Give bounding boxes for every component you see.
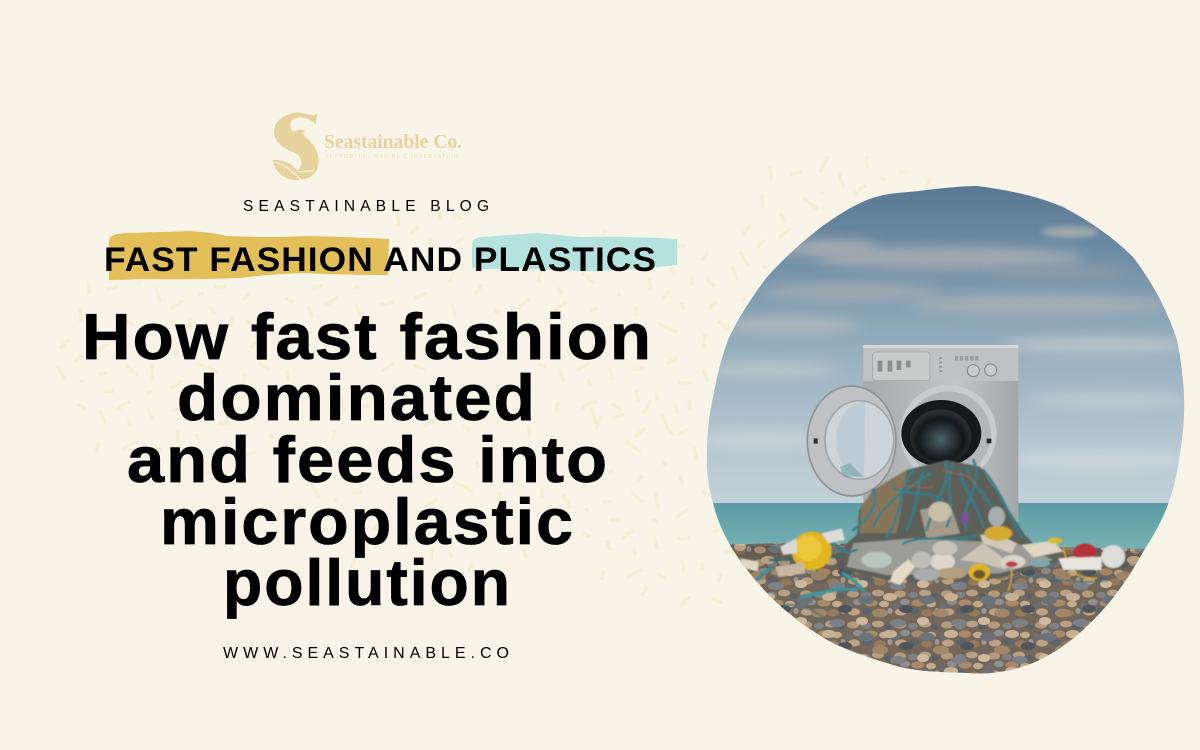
logo: Seastainable Co.: [272, 113, 462, 182]
washing machine: [863, 345, 1018, 522]
logo tagline: SUPPORTING MARINE CONSERVATION: [325, 154, 458, 160]
main title: and feeds into: [127, 423, 609, 496]
main title: How fast fashion: [82, 300, 653, 373]
main title: dominated: [177, 361, 537, 434]
pile of nets and plastic waste: [843, 460, 1063, 580]
highlight: teal: [472, 233, 677, 271]
main title: [82, 300, 653, 619]
subtitle: Fast Fashion and Plastics: FAST FASHION AND PLASTICS: [104, 241, 657, 279]
plastic bottles, buckets and floats: [740, 502, 1125, 585]
logo mark: whale S: [272, 113, 319, 182]
main title: microplastic: [160, 485, 575, 558]
highlight: gold: [109, 231, 389, 280]
photo: washing machine on a beach spilling plastic waste: [706, 186, 1184, 674]
pebble beach: [730, 543, 1145, 674]
open door: [807, 386, 896, 496]
eyebrow: Seastainable Blog: SEASTAINABLE BLOG: [243, 198, 489, 215]
website url: WWW.SEASTAINABLE.CO: [223, 645, 509, 662]
sea: [700, 503, 1190, 573]
sky with clouds: [700, 180, 1200, 506]
logo wordmark: Seastainable Co.: [324, 131, 462, 153]
main title: pollution: [223, 546, 512, 619]
teal rope strands: [757, 460, 1110, 620]
